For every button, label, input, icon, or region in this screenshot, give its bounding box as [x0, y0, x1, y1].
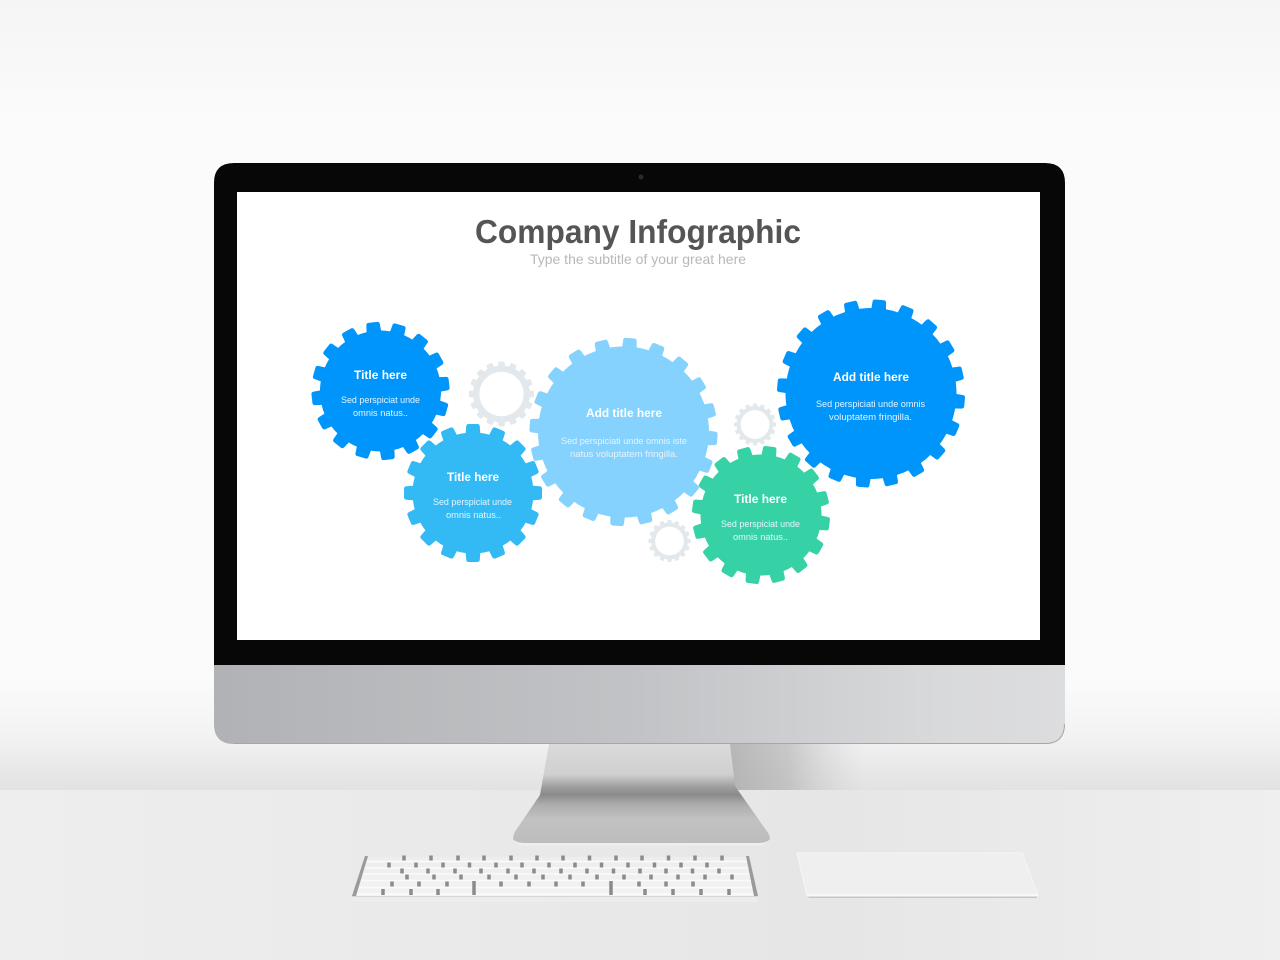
gear 5 heading: Title here: [734, 492, 787, 506]
gear 3 body: natus voluptatem fringilla.: [570, 449, 678, 460]
chin: [214, 665, 1065, 744]
gear 3 body: Sed perspiciati unde omnis iste: [561, 436, 687, 447]
gear 3: light blue: [523, 332, 724, 532]
gear 1: blue: [304, 315, 457, 467]
screen: [237, 192, 1040, 640]
gear 5 body: omnis natus..: [733, 532, 788, 543]
gear 2 body: omnis natus..: [446, 510, 501, 521]
subtitle: Type the subtitle of your great here: [530, 251, 746, 267]
keyboard: [352, 856, 758, 902]
bezel: [214, 163, 1065, 665]
small gear: grey bottom: [648, 520, 691, 562]
camera: [638, 174, 644, 180]
title: Company Infographic: [475, 213, 801, 250]
gear 1 body: Sed perspiciat unde: [341, 395, 420, 406]
gear 2 heading: Title here: [447, 470, 499, 484]
gear 1 heading: Title here: [354, 368, 407, 382]
monitor stand: [513, 744, 770, 846]
gear 4 heading: Add title here: [833, 370, 909, 384]
gear 3 heading: Add title here: [586, 406, 662, 420]
gear 4 body: Sed perspiciati unde omnis: [816, 399, 925, 410]
gear 2: sky blue: [404, 424, 542, 562]
gear 2 body: Sed perspiciat unde: [433, 497, 512, 508]
monitor: [214, 163, 1065, 744]
small gear: grey left: [469, 362, 534, 426]
gear 4 body: voluptatem fringilla.: [829, 412, 912, 423]
trackpad: [797, 853, 1038, 898]
small gear: grey right: [734, 403, 776, 446]
gear 4: large blue: [769, 291, 973, 496]
desk surface: [0, 790, 1280, 960]
wall shadow: [725, 744, 865, 790]
gear 1 body: omnis natus..: [353, 408, 408, 419]
gear 5 body: Sed perspiciat unde: [721, 519, 800, 530]
gear 5: green: [684, 438, 838, 592]
